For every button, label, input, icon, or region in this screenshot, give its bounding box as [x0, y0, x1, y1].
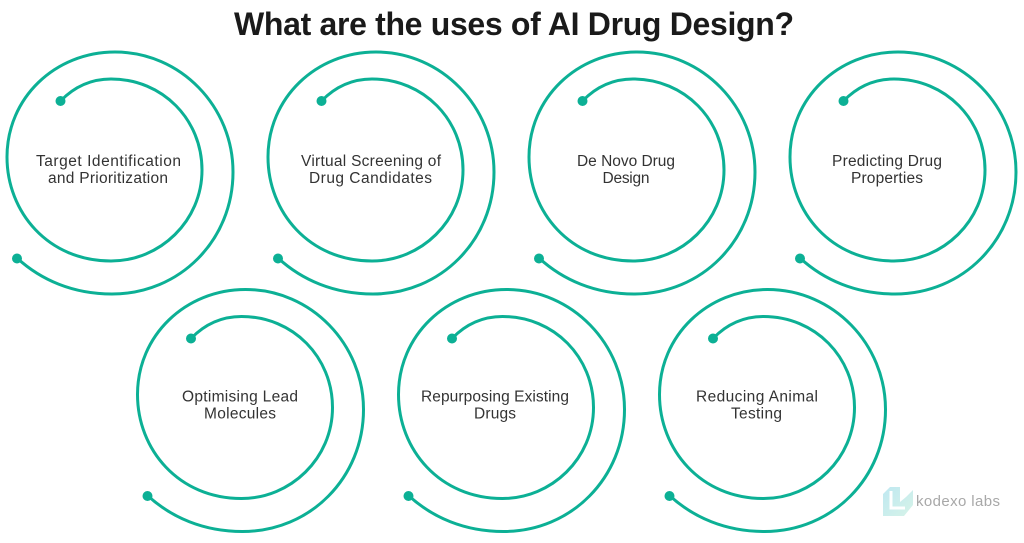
label: Virtual Screening of: [301, 153, 442, 170]
label: Predicting Drug: [832, 153, 942, 170]
label: Molecules: [204, 406, 276, 422]
label: Properties: [851, 170, 923, 187]
label: Optimising Lead: [182, 388, 298, 406]
spiral card: De Novo Drug Design: [529, 52, 755, 294]
spiral card: Reducing Animal Testing: [660, 290, 886, 532]
label: Reducing Animal: [696, 388, 818, 406]
spiral card: Virtual Screening of Drug Candidates: [268, 52, 494, 294]
spiral card: Optimising Lead Molecules: [138, 290, 364, 532]
label: Design: [602, 170, 650, 187]
icon: logo mark: [883, 487, 913, 516]
label: De Novo Drug: [577, 153, 675, 170]
label: Drugs: [474, 406, 516, 422]
label: and Prioritization: [48, 170, 168, 187]
label: Target Identification: [36, 153, 181, 170]
label: Testing: [731, 406, 782, 422]
spiral card: Predicting Drug Properties: [790, 52, 1016, 294]
logo text: kodexo labs: [916, 493, 1000, 510]
title: What are the uses of AI Drug Design?: [234, 6, 794, 42]
label: Drug Candidates: [309, 170, 432, 187]
spiral card: Repurposing Existing Drugs: [398, 290, 624, 532]
logo: kodexo labs: [883, 487, 1000, 516]
label: Repurposing Existing: [421, 388, 569, 406]
spiral card: Target Identification and Prioritization: [7, 52, 233, 294]
